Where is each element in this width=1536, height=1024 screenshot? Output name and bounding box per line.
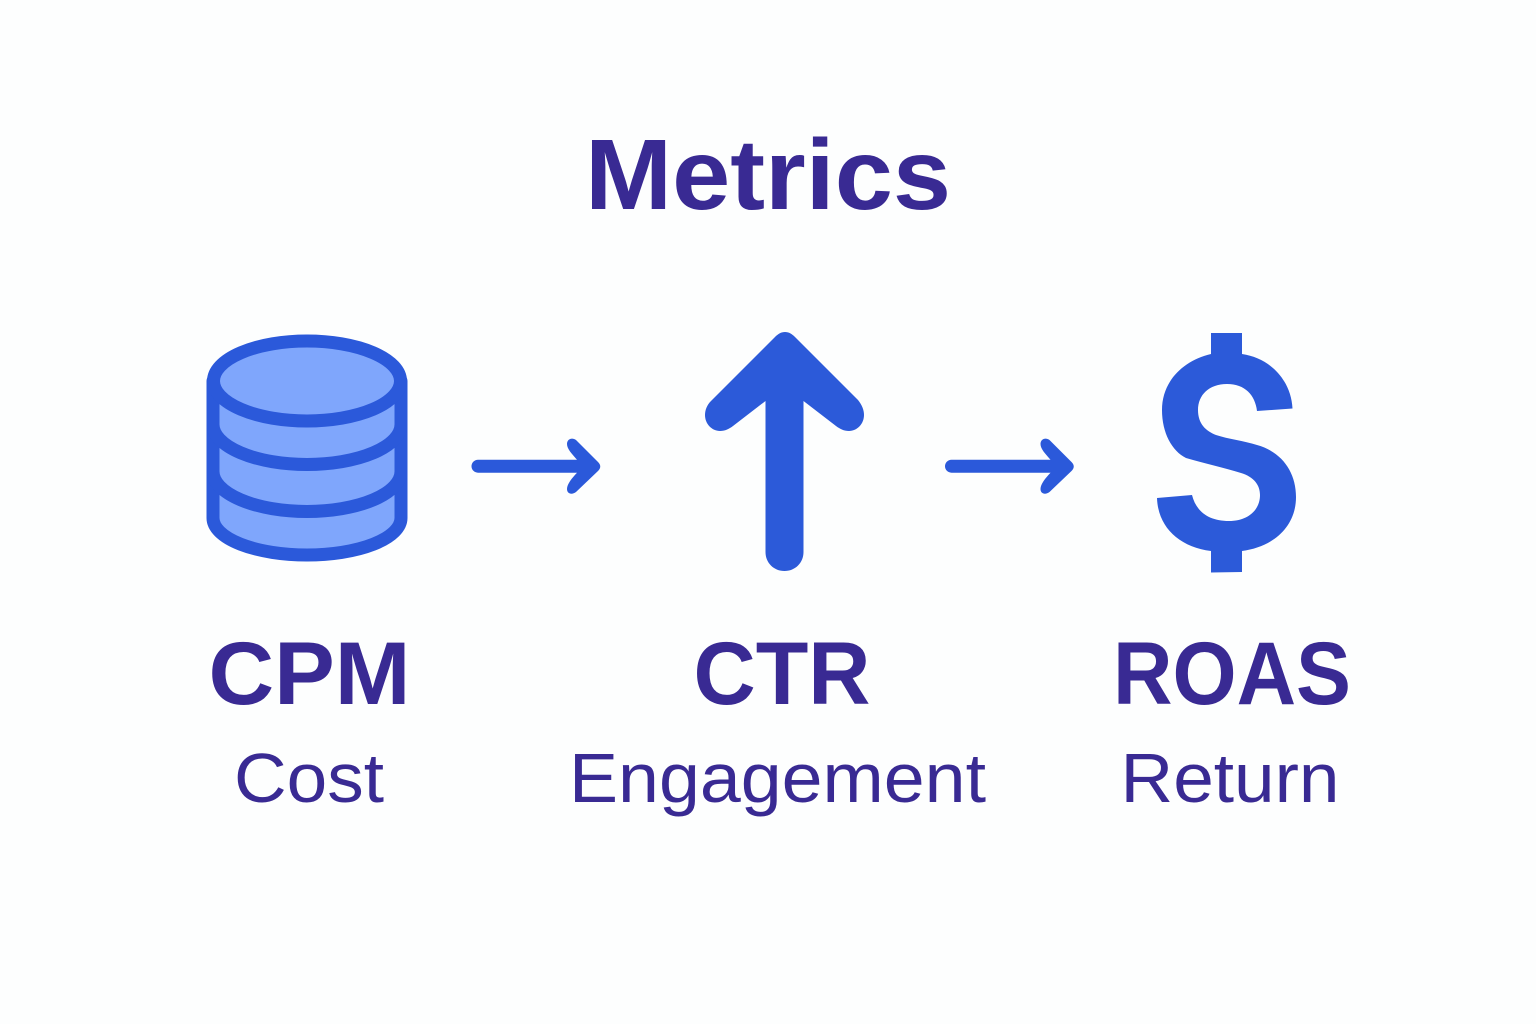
icon: database	[213, 341, 401, 555]
label: CPM: CPM	[208, 623, 410, 723]
label: ROAS: ROAS	[1113, 623, 1351, 723]
sublabel: Cost: Cost	[234, 739, 384, 817]
arrow: CPM to CTR	[472, 439, 600, 494]
sublabel: Engagement: Engagement	[569, 739, 986, 817]
icon: dollar sign	[1157, 333, 1296, 572]
title: Metrics	[585, 119, 951, 231]
label: CTR: CTR	[694, 623, 870, 723]
arrow: CTR to ROAS	[945, 439, 1074, 494]
icon: up arrow	[705, 332, 864, 571]
sublabel: Return: Return	[1120, 739, 1340, 817]
